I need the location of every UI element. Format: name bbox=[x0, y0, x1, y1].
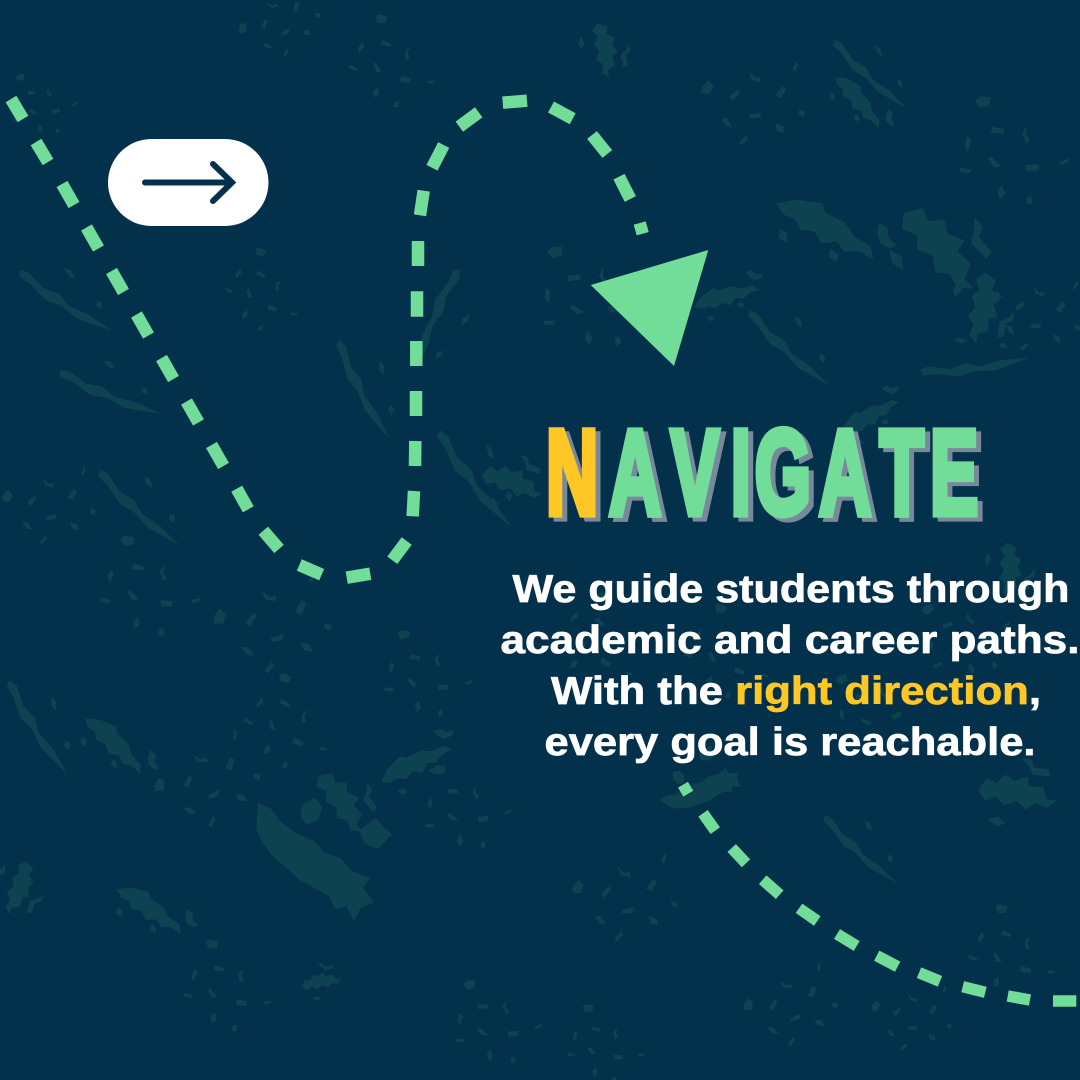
icon: white pill with arrow bbox=[108, 139, 268, 226]
body text bbox=[500, 568, 1080, 764]
body text: We guide students through bbox=[512, 568, 1070, 611]
body text: With the right direction , bbox=[551, 670, 1041, 713]
body text: academic and career paths. bbox=[500, 619, 1080, 662]
dashed path: lower route bbox=[683, 785, 1076, 1001]
body text: every goal is reachable. bbox=[544, 721, 1036, 764]
title: NAVIGATE: NAVIGATE bbox=[546, 406, 978, 541]
dashed path: main looping route bbox=[11, 99, 643, 578]
icon: green triangle arrowhead bbox=[591, 250, 708, 366]
